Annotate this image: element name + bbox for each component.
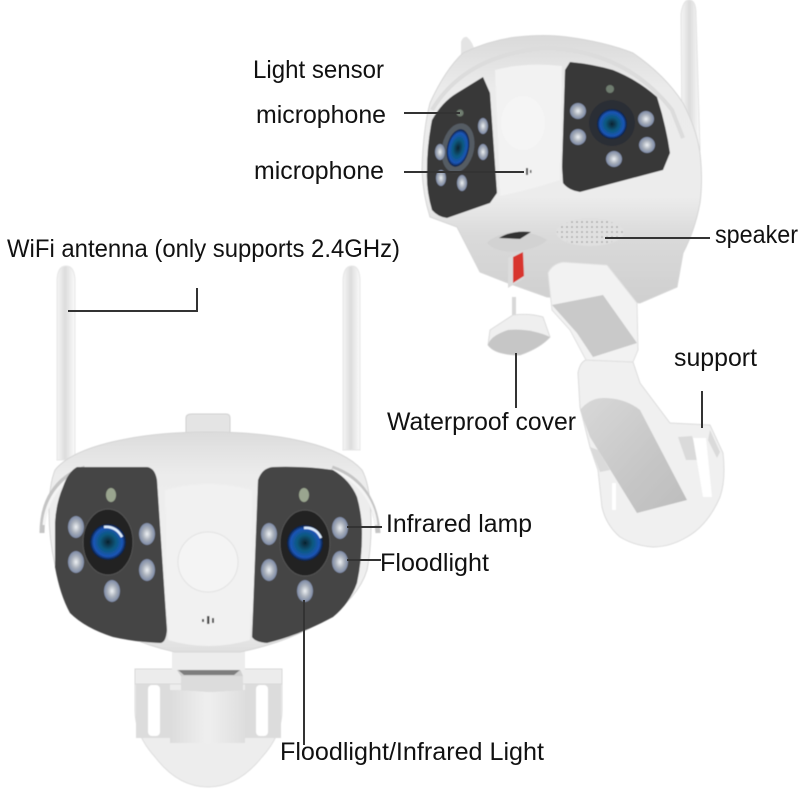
bracket side fins [136, 684, 281, 738]
label: floodlight: Floodlight [380, 549, 489, 577]
right antenna [343, 266, 360, 450]
neck [548, 262, 638, 362]
camera body [49, 432, 371, 652]
speaker holes [202, 616, 214, 624]
sensors [456, 85, 614, 116]
center column [165, 484, 252, 646]
bracket slots [612, 438, 712, 510]
top connector [186, 414, 230, 456]
left lens panel [55, 467, 167, 643]
antenna [681, 0, 700, 150]
center disc [501, 96, 545, 150]
left lens [437, 120, 479, 176]
label: floodlight or infrared light: Floodlight/Infrared Light [280, 738, 544, 766]
left panel [427, 77, 497, 218]
neck [172, 648, 245, 670]
left antenna [57, 266, 75, 460]
light sensors [106, 488, 309, 502]
left leds [68, 516, 155, 602]
left leds [435, 118, 488, 191]
right lens [589, 100, 635, 146]
bracket slots [148, 685, 268, 736]
center column [495, 65, 562, 196]
card slot [487, 232, 547, 252]
bracket upright [170, 690, 245, 743]
bracket collar [176, 669, 243, 692]
front camera [42, 266, 378, 787]
label: microphone top: microphone [256, 101, 386, 129]
label: wifi antenna: WiFi antenna (only supports 2.4GHz) [7, 235, 400, 263]
bracket inner [580, 398, 687, 513]
microphone slot [526, 168, 532, 175]
right leds [570, 103, 655, 167]
label: light sensor: Light sensor [253, 56, 384, 84]
speaker grille [556, 218, 624, 246]
label: waterproof cover: Waterproof cover [387, 408, 576, 436]
hood edge [42, 468, 378, 533]
right lens [280, 510, 330, 576]
camera body [422, 36, 702, 303]
hood band [432, 48, 683, 138]
neck hinge [552, 295, 637, 357]
left lens [83, 509, 133, 575]
label: microphone bottom: microphone [254, 157, 384, 185]
center disc [178, 532, 238, 592]
memory card [508, 252, 524, 288]
antenna stub [461, 37, 475, 55]
right panel [562, 62, 670, 192]
waterproof cover [488, 297, 550, 355]
bracket side fins [590, 430, 720, 472]
right lens panel [252, 467, 362, 643]
right leds [261, 517, 348, 602]
wall bracket base [135, 680, 282, 787]
rear three-quarter camera [422, 0, 724, 547]
wall bracket [578, 360, 724, 547]
bracket top plate [135, 669, 282, 684]
label: infrared lamp: Infrared lamp [386, 510, 532, 538]
callout lines [68, 113, 710, 745]
label: support: support [674, 344, 757, 372]
